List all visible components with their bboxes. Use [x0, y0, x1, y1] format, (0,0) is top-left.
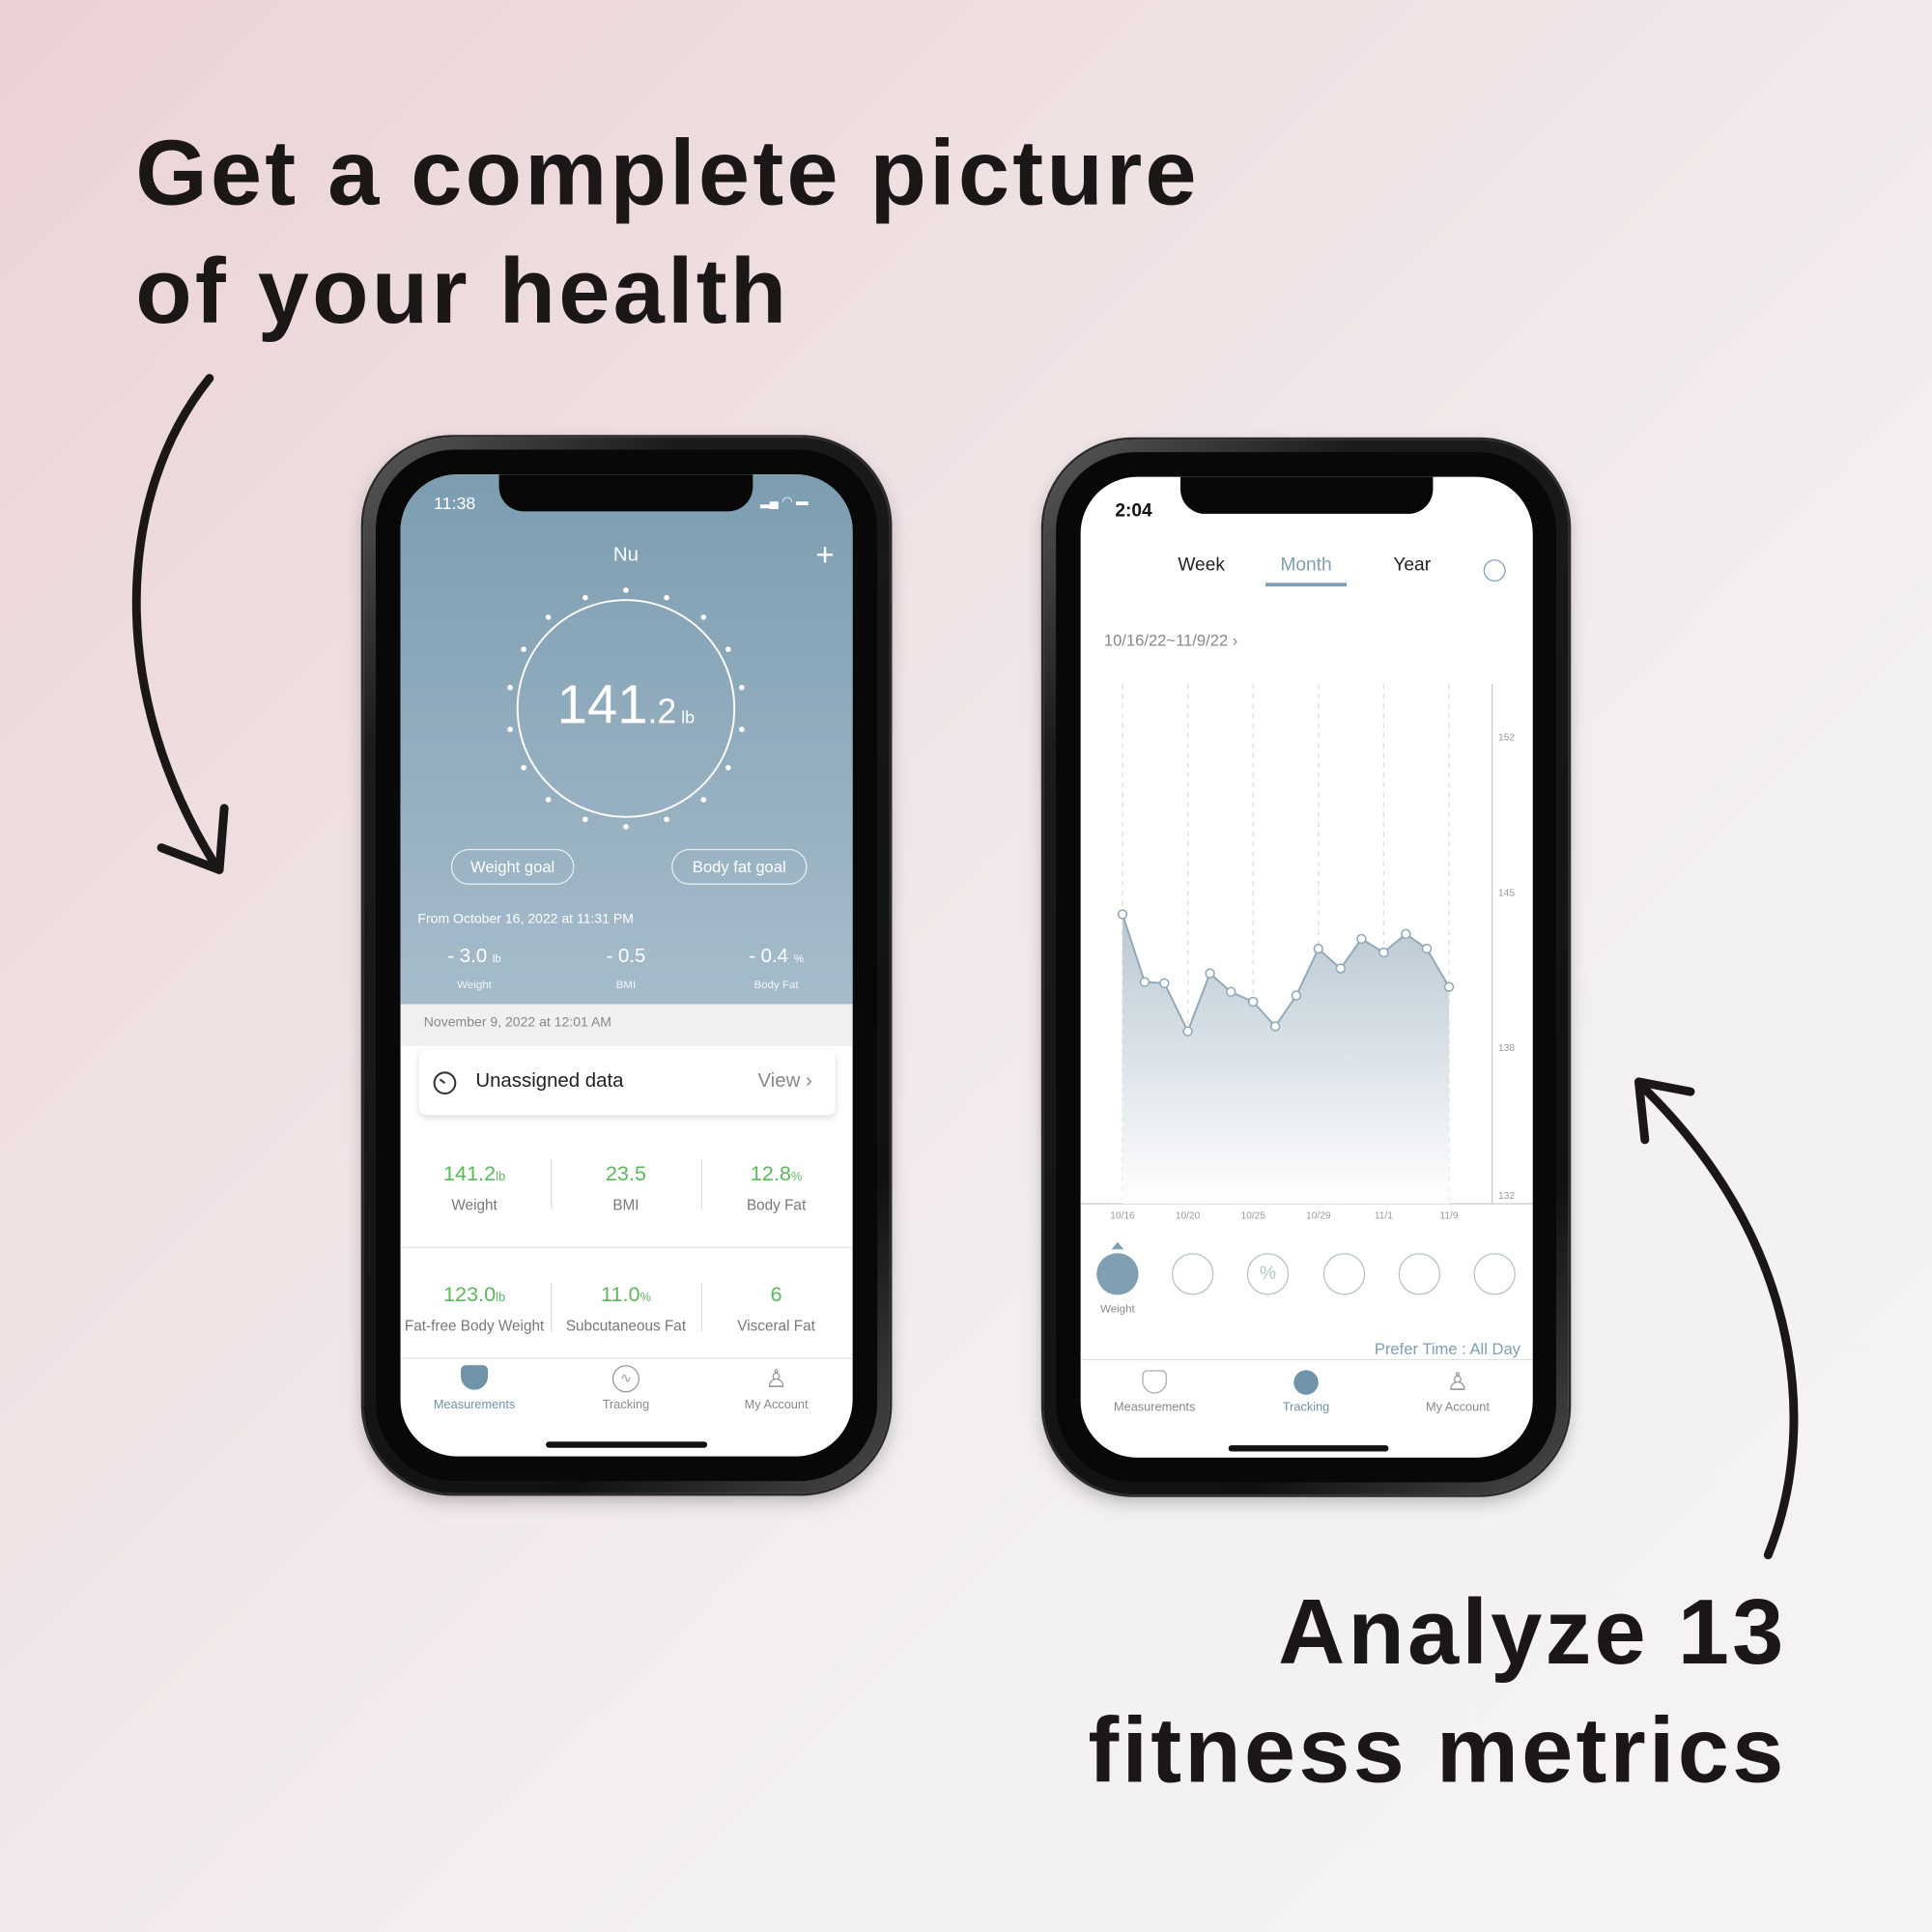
line chart: 10/25 — [1240, 1210, 1265, 1221]
arrow: left curved arrow — [131, 374, 229, 874]
screen: measurements: ♙ — [765, 1367, 787, 1394]
screen: measurements: 141.2 lb — [557, 675, 695, 735]
metric icons row — [1096, 1253, 1139, 1295]
screen: measurements: November 9, 2022 at 12:01 AM — [424, 1015, 611, 1030]
title: bottom: Analyze 13 — [1278, 1579, 1786, 1683]
tab bar — [461, 1365, 488, 1390]
title: top — [135, 121, 1200, 343]
screen: tracking chart: Year — [1393, 554, 1431, 576]
line chart — [1081, 684, 1532, 1221]
screen: measurements: BMI — [616, 979, 636, 991]
line chart: 138 — [1498, 1043, 1515, 1054]
screen: tracking chart: % — [1260, 1263, 1276, 1284]
screen: measurements: My Account — [745, 1399, 809, 1412]
tab bar — [1142, 1370, 1167, 1394]
line chart: 11/9 — [1439, 1210, 1459, 1221]
card: unassigned data: View › — [757, 1070, 812, 1092]
screen: measurements: + — [815, 536, 835, 573]
screen: tracking chart: Weight — [1100, 1302, 1135, 1315]
line chart: 132 — [1498, 1191, 1515, 1202]
arrow: right curved arrow — [1634, 1077, 1799, 1559]
screen: measurements: 6 — [771, 1283, 782, 1306]
line chart: 10/20 — [1176, 1210, 1201, 1221]
phone: right tracking — [1043, 440, 1569, 1494]
line chart: 11/1 — [1375, 1210, 1393, 1221]
screen: measurements: Weight — [451, 1197, 497, 1213]
card: unassigned data — [419, 1050, 836, 1115]
screen: measurements: Body fat goal — [693, 858, 786, 876]
screen: tracking chart: Prefer Time : All Day — [1375, 1339, 1520, 1358]
line chart: 145 — [1498, 888, 1515, 898]
screen: tracking chart: 10/16/22~11/9/22 › — [1104, 631, 1237, 649]
phone: left measurements — [363, 438, 890, 1493]
metrics grid: 141.2lb — [443, 1162, 505, 1185]
screen: measurements: BMI — [612, 1197, 639, 1213]
line chart: 10/16 — [1110, 1210, 1135, 1221]
title: top: Get a complete picture — [135, 121, 1200, 224]
change stats: From October 16, 2022 at 11:31 PM — [417, 912, 634, 926]
screen: tracking chart: Measurements — [1114, 1401, 1195, 1414]
screen: tracking chart: 2:04 — [1115, 500, 1152, 522]
screen: measurements: Body Fat — [747, 1197, 806, 1213]
screen: measurements: - 0.5 — [607, 947, 645, 967]
weight gauge — [507, 587, 745, 830]
line chart: 152 — [1498, 733, 1515, 744]
screen: measurements: 12.8% — [751, 1162, 802, 1185]
screen: tracking chart: My Account — [1426, 1401, 1490, 1414]
period tabs: Week — [1178, 554, 1225, 576]
screen: tracking chart: ♙ — [1446, 1369, 1468, 1396]
screen: measurements: Weight — [457, 979, 492, 991]
goal buttons — [451, 849, 574, 885]
card: unassigned data: Unassigned data — [475, 1070, 624, 1092]
screen: measurements: Visceral Fat — [737, 1318, 815, 1334]
header Nu: Nu — [613, 545, 639, 565]
screen: tracking chart: Tracking — [1283, 1401, 1329, 1414]
screen: measurements: 123.0lb — [443, 1283, 505, 1306]
screen: measurements: Body Fat — [754, 979, 799, 991]
screen: measurements: Tracking — [603, 1399, 649, 1412]
screen: measurements: Fat-free Body Weight — [405, 1318, 544, 1334]
screen: measurements — [401, 474, 853, 1457]
screen: measurements: Subcutaneous Fat — [566, 1318, 686, 1334]
goal buttons: Weight goal — [470, 858, 554, 876]
screen: measurements: - 0.4 % — [749, 947, 804, 967]
status time: 11:38 — [434, 493, 475, 513]
title: bottom — [1088, 1579, 1786, 1802]
screen: measurements: ∿ — [620, 1372, 632, 1386]
screen: tracking chart: Month — [1280, 554, 1332, 576]
line chart: 10/29 — [1306, 1210, 1331, 1221]
screen: measurements: - 3.0 lb — [447, 947, 501, 967]
title: top: of your health — [135, 239, 789, 343]
screen: measurements: 23.5 — [606, 1162, 646, 1185]
screen: measurements: 11.0% — [601, 1283, 651, 1306]
screen: tracking chart — [1081, 477, 1533, 1458]
title: bottom: fitness metrics — [1088, 1698, 1786, 1802]
screen: measurements: Measurements — [434, 1399, 515, 1412]
screen: measurements: ▂▄ ◠ ▬ — [760, 496, 809, 509]
